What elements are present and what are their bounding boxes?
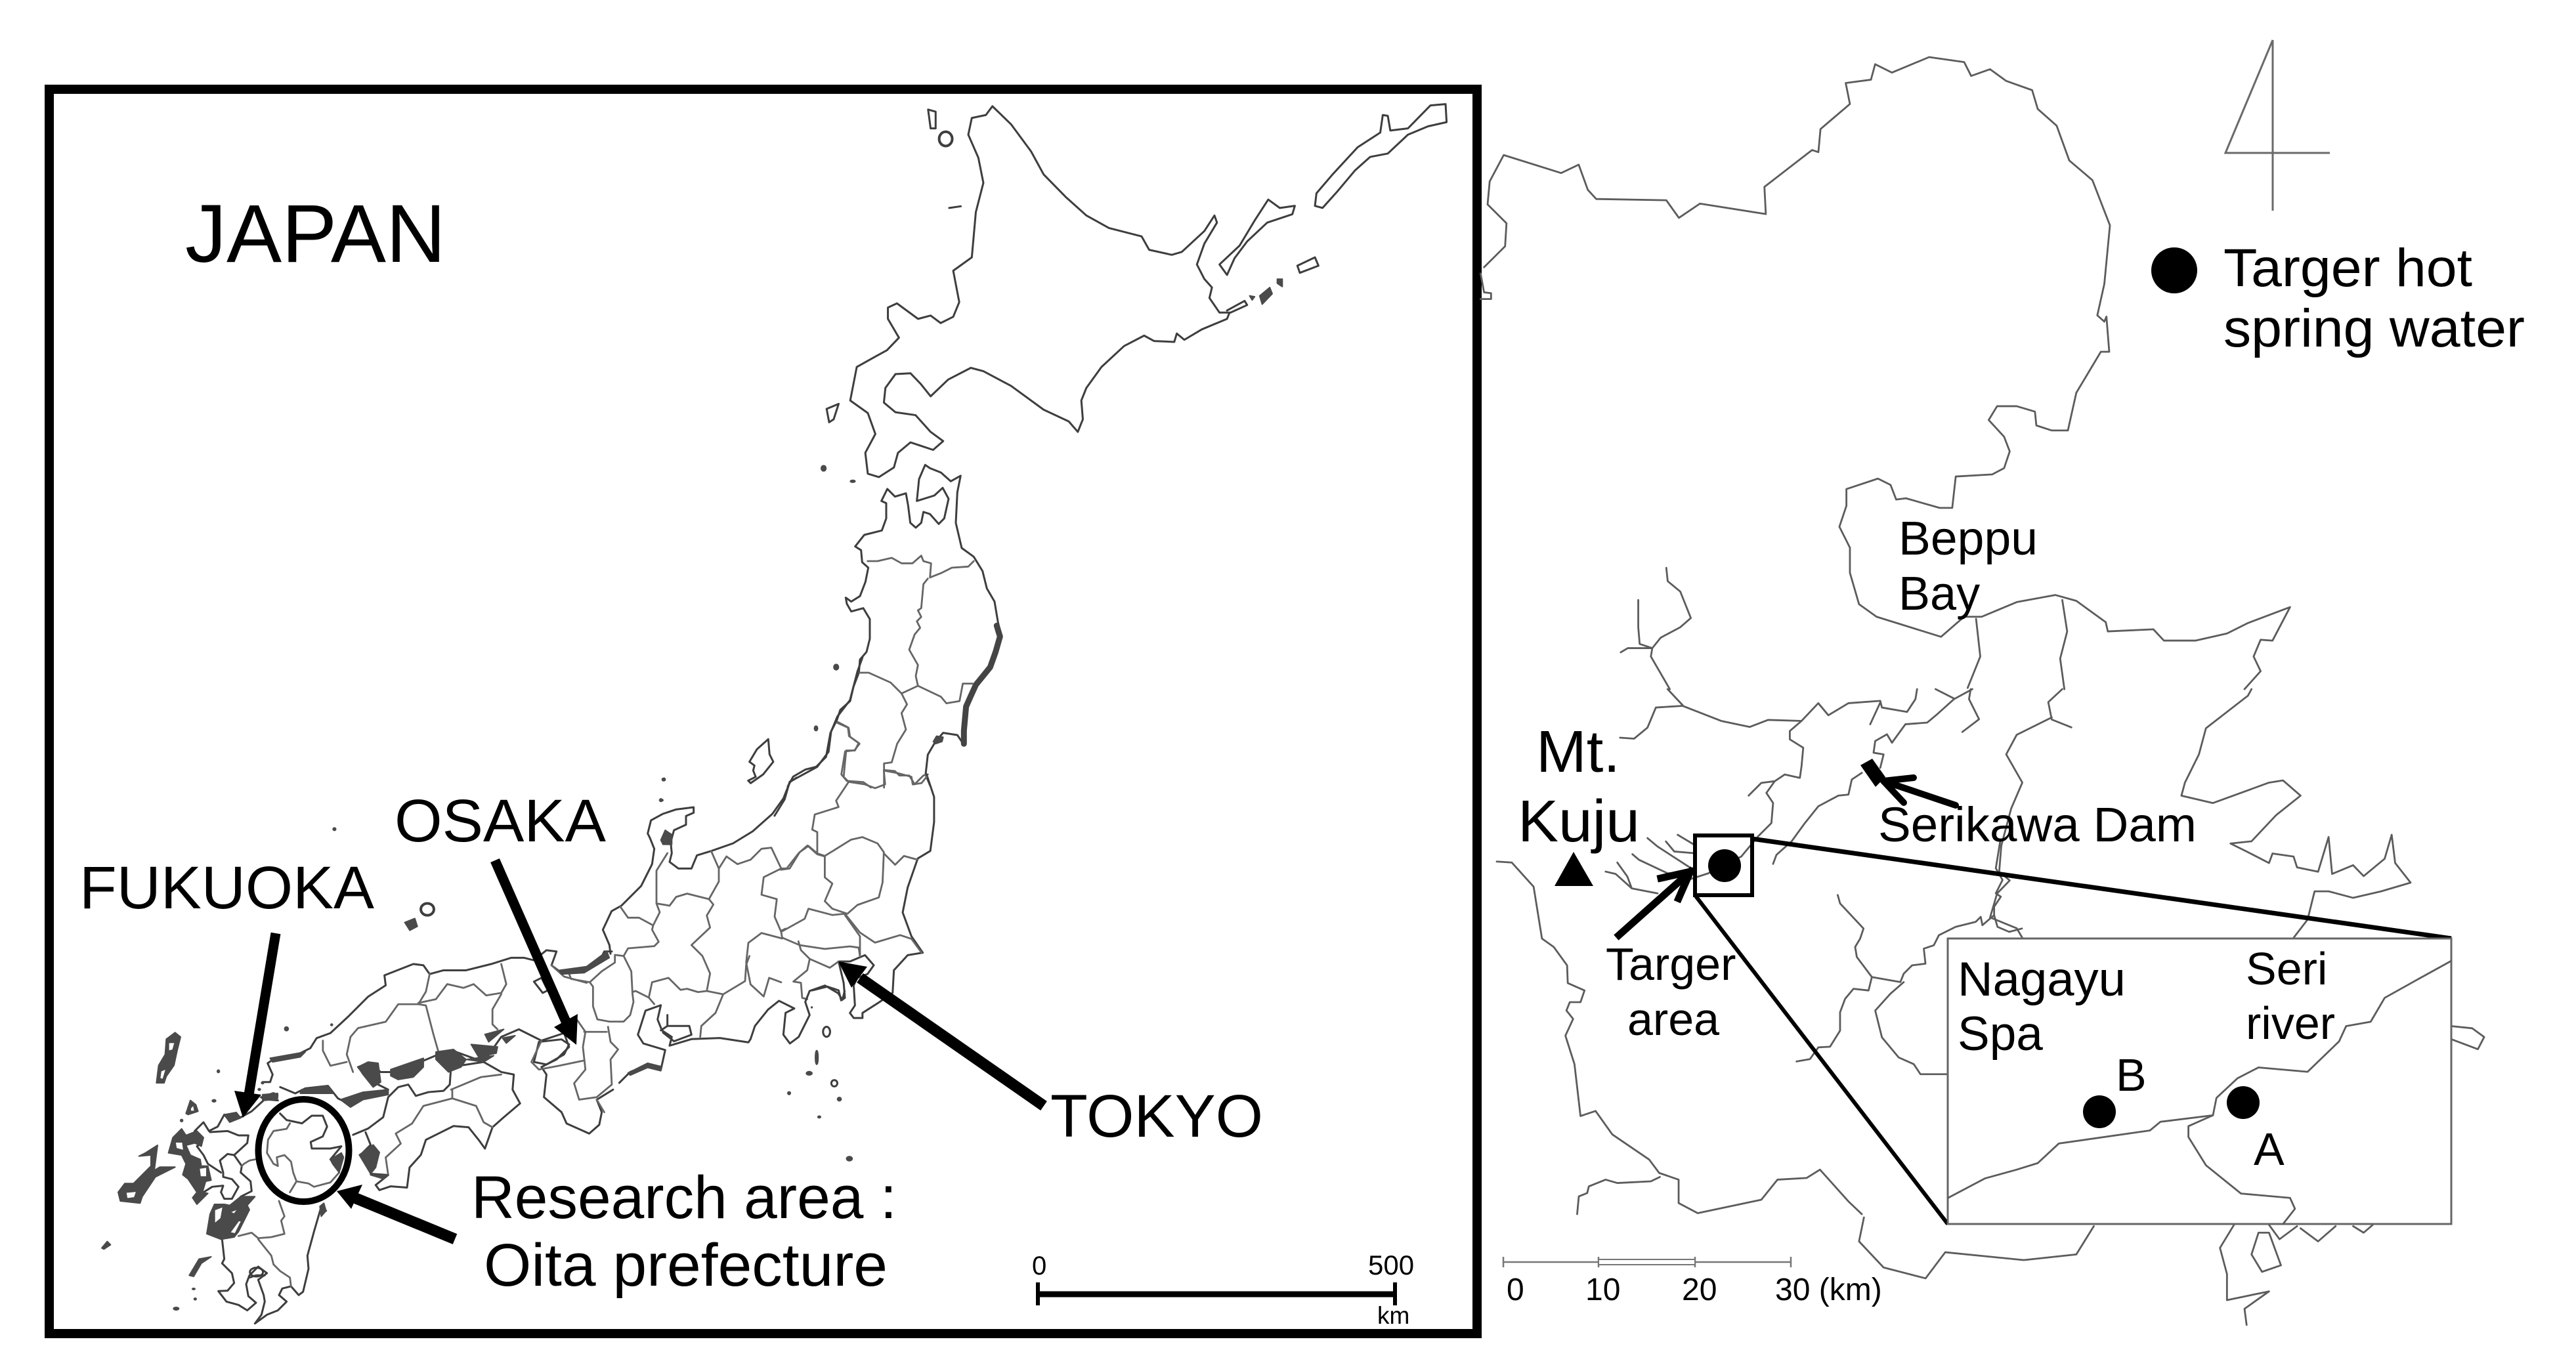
arrow: to Fukuoka [234, 933, 276, 1118]
label: Serikawa Dam: Serikawa Dam [1878, 797, 2197, 852]
map: western Honshu and Shikoku [263, 950, 618, 1190]
scale bar: Japan map [1032, 1250, 1414, 1329]
circle: research area Oita [259, 1099, 349, 1202]
label: FUKUOKA: FUKUOKA [79, 854, 375, 921]
arrow: to Osaka [495, 860, 578, 1045]
label: Beppu Bay [1899, 513, 2038, 620]
inset label: Seri river [2246, 943, 2335, 1049]
map: western rivers and boundary [1497, 689, 2022, 1214]
label: Beppu Bay: Beppu [1899, 513, 2038, 565]
scale bar: regional map: 0 [1507, 1273, 1524, 1307]
target area box [1695, 835, 1752, 895]
scale bar: Japan map: km [1377, 1302, 1409, 1329]
inset label: Nagayu Spa [1958, 953, 2126, 1061]
label: Mt. Kuju [1518, 719, 1640, 854]
map: Chubu region [569, 778, 845, 1083]
heading: JAPAN: JAPAN [185, 188, 446, 280]
scale bar: regional map: 20 [1682, 1273, 1717, 1307]
label: research area [471, 1164, 897, 1299]
label: TOKYO: TOKYO [1050, 1083, 1263, 1150]
site B [2083, 1049, 2147, 1128]
site A [2227, 1086, 2285, 1175]
label: OSAKA: OSAKA [395, 788, 607, 854]
panel: Japan map frame [49, 89, 1477, 1334]
site A: A [2254, 1124, 2285, 1175]
label: Beppu Bay: Bay [1899, 568, 1980, 620]
legend: target hot spring water: Targer hot [2223, 238, 2472, 298]
inset: Nagayu Spa detail [1948, 939, 2451, 1224]
legend: target hot spring water [2151, 238, 2525, 358]
map: southern and eastern boundary [1859, 689, 2484, 1325]
arrow: to target area [1619, 872, 1690, 935]
zoom lines to inset [1695, 839, 2451, 1224]
label: Targer area: Targer [1606, 939, 1736, 990]
icon: Mt. Kuju triangle [1555, 852, 1593, 886]
map: Oki and Izu islands [333, 778, 852, 1161]
inset label: Seri river: Seri [2246, 943, 2327, 994]
map: Kyushu and nearby islands [102, 1032, 343, 1324]
scale bar: regional map: 30 (km) [1775, 1273, 1882, 1307]
inset label: Nagayu Spa: Nagayu [1958, 953, 2126, 1006]
map: Japan outline [102, 104, 1447, 1324]
map: Tohoku region [788, 465, 1001, 788]
label: research area: Oita prefecture [484, 1232, 888, 1299]
label: Targer area [1606, 939, 1736, 1045]
map: northern Oita coastline [1480, 57, 2290, 689]
inset: Seri river [1948, 961, 2451, 1224]
scale bar: regional map: 10 [1585, 1273, 1620, 1307]
north arrow [2225, 40, 2330, 211]
inset label: Seri river: river [2246, 998, 2335, 1049]
inset label: Nagayu Spa: Spa [1958, 1007, 2043, 1061]
label: Mt. Kuju: Mt. [1536, 719, 1620, 785]
legend: target hot spring water: spring water [2223, 299, 2525, 358]
site B: B [2116, 1049, 2147, 1101]
arrow: to Tokyo [838, 961, 1044, 1106]
scale bar: regional map [1503, 1257, 1882, 1307]
map: Kanto region [748, 658, 934, 1037]
arrow: to Serikawa dam [1883, 778, 1956, 805]
label: Mt. Kuju: Kuju [1518, 789, 1640, 854]
scale bar: Japan map: 0 [1032, 1252, 1046, 1280]
map: Hokkaido and northern islands [821, 104, 1447, 670]
icon: Serikawa dam [1860, 759, 1885, 787]
label: research area: Research area : [471, 1164, 897, 1231]
scale bar: Japan map: 500 [1368, 1250, 1414, 1280]
label: Targer area: area [1627, 994, 1719, 1045]
arrow: to research area [337, 1185, 455, 1239]
